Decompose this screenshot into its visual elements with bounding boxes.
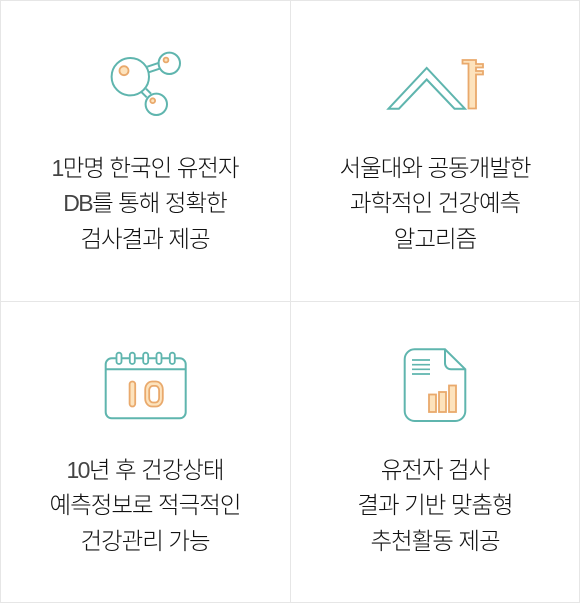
text: 10-year health prediction: 예측정보로 적극적인 bbox=[50, 492, 240, 518]
text: 10-year health prediction: 건강관리 가능 bbox=[80, 528, 210, 554]
text: Korean genome database: DB를 통해 정확한 bbox=[63, 190, 227, 216]
text: co-developed algorithm: 과학적인 건강예측 bbox=[350, 190, 520, 216]
text: 10-year health prediction bbox=[50, 457, 240, 554]
icon: molecule bbox=[110, 52, 181, 116]
text: 10-year health prediction: 10년 후 건강상태 bbox=[66, 457, 224, 483]
panel: co-developed algorithm bbox=[340, 59, 531, 252]
text: co-developed algorithm bbox=[340, 155, 531, 252]
text: personalized recommendations: 결과 기반 맞춤형 bbox=[357, 492, 513, 518]
panel: personalized recommendations bbox=[357, 348, 513, 554]
text: co-developed algorithm: 서울대와 공동개발한 bbox=[340, 155, 530, 181]
panel: Korean genome database bbox=[51, 52, 239, 252]
text: co-developed algorithm: 알고리즘 bbox=[394, 226, 476, 252]
icon: document with bar chart bbox=[404, 348, 466, 422]
text: Korean genome database: 검사결과 제공 bbox=[80, 226, 210, 252]
text: personalized recommendations bbox=[357, 457, 513, 554]
text: personalized recommendations: 추천활동 제공 bbox=[370, 528, 500, 554]
icon: calendar bbox=[104, 352, 187, 420]
text: personalized recommendations: 유전자 검사 bbox=[381, 457, 489, 483]
text: Korean genome database bbox=[51, 155, 239, 252]
text: Korean genome database: 1만명 한국인 유전자 bbox=[51, 155, 239, 181]
icon: roof and key bbox=[386, 59, 484, 110]
panel: 10-year health prediction bbox=[50, 352, 240, 554]
